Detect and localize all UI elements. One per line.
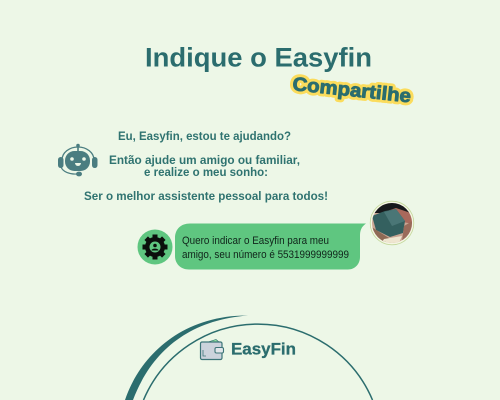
icon: gear badge <box>138 230 172 264</box>
title: Indique o Easyfin <box>145 42 372 72</box>
chat message text <box>182 235 349 261</box>
photo avatar: hands holding wallet <box>370 201 414 245</box>
text block: robot message <box>84 131 328 203</box>
sticker heading: heavy letter layer: Compartilhe <box>291 74 412 107</box>
icon: wallet <box>200 340 224 360</box>
decorative arc: thick swoosh <box>125 315 248 400</box>
chat message text: Quero indicar o Easyfin para meu <box>182 235 329 247</box>
text block: robot message: Eu, Easyfin, estou te ajudando? <box>118 131 291 143</box>
logo: EasyFin <box>200 340 296 360</box>
decorative arc: thin circle <box>144 324 372 400</box>
chat bubble <box>175 224 366 270</box>
chat message text: amigo, seu número é 5531999999999 <box>182 249 349 261</box>
text block: robot message: Ser o melhor assistente pessoal para todos! <box>84 191 328 203</box>
text block: robot message: e realize o meu sonho: <box>144 167 268 179</box>
logo wordmark: EasyFin <box>231 340 296 358</box>
sticker heading: Compartilhe: Compartilhe <box>291 74 412 107</box>
icon: robot assistant <box>58 144 98 176</box>
text block: robot message: Então ajude um amigo ou familiar, <box>109 155 300 167</box>
